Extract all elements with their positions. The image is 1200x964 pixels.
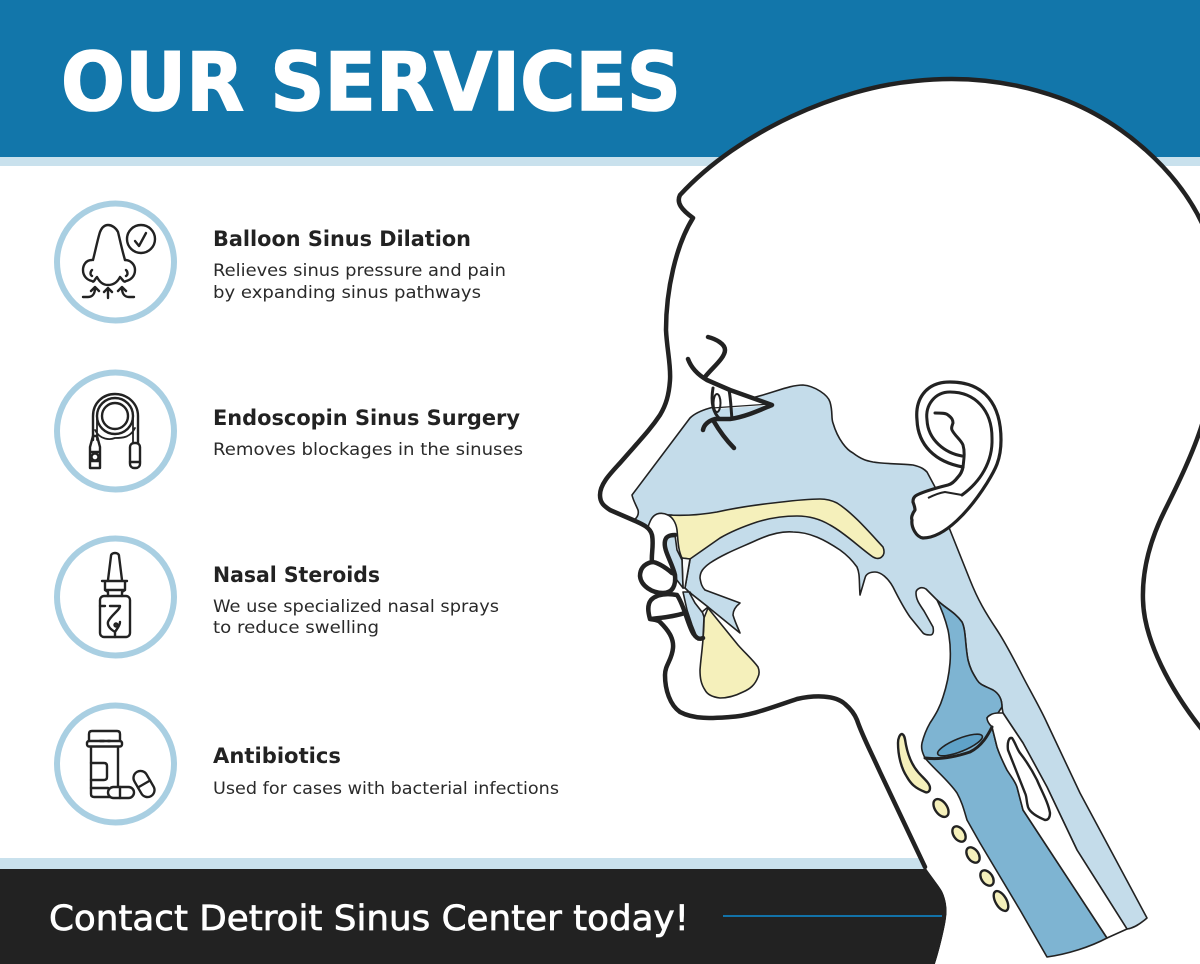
icon ring xyxy=(57,204,174,320)
footer bar xyxy=(0,858,947,964)
footer call to action: Contact Detroit Sinus Center today! xyxy=(49,899,689,939)
head outline xyxy=(600,79,1200,562)
service: nasal steroids xyxy=(57,538,499,656)
heading: Antibiotics xyxy=(213,744,341,768)
tracheal cartilage ring xyxy=(1008,738,1050,820)
upper lip xyxy=(640,535,675,593)
lower lip and chin xyxy=(648,594,925,867)
white premaxilla sliver xyxy=(682,558,690,588)
yellow mandible xyxy=(700,608,759,698)
head illustration xyxy=(600,79,1200,964)
yellow neck cartilage xyxy=(898,734,1011,913)
description: Relieves sinus pressure and pain xyxy=(213,261,506,281)
lower gum strip xyxy=(683,592,704,640)
icon: nose with check xyxy=(83,225,155,298)
icon ring xyxy=(57,706,174,822)
back of head xyxy=(1143,418,1200,732)
heading: Balloon Sinus Dilation xyxy=(213,227,471,251)
footer accent line xyxy=(723,915,942,917)
upper gum strip xyxy=(665,535,683,588)
heading: Nasal Steroids xyxy=(213,563,380,587)
description: to reduce swelling xyxy=(213,618,379,638)
description: We use specialized nasal sprays xyxy=(213,597,499,617)
lower tooth xyxy=(689,592,708,612)
icon: nasal spray bottle xyxy=(100,553,130,637)
service: endoscopic sinus surgery xyxy=(57,372,523,490)
light blue airway xyxy=(632,385,1147,929)
service: antibiotics xyxy=(57,706,559,822)
description xyxy=(213,261,506,303)
description: Used for cases with bacterial infections xyxy=(213,779,559,799)
eye and brow xyxy=(688,337,772,448)
white epiglottis and tube xyxy=(987,713,1127,938)
header band xyxy=(0,0,1200,166)
ear xyxy=(912,382,1001,538)
eye white xyxy=(716,386,771,409)
description: Removes blockages in the sinuses xyxy=(213,440,523,460)
service: balloon sinus dilation xyxy=(57,204,506,320)
larynx front curve xyxy=(925,727,992,759)
dark blue larynx and trachea xyxy=(922,600,1107,957)
vocal fold ellipse xyxy=(935,730,985,760)
description: by expanding sinus pathways xyxy=(213,283,481,303)
description xyxy=(213,597,499,638)
yellow hard palate xyxy=(668,499,884,559)
heading: Endoscopin Sinus Surgery xyxy=(213,406,520,430)
icon: endoscope cable xyxy=(90,394,140,468)
title: OUR SERVICES xyxy=(61,36,681,129)
icon ring xyxy=(57,372,174,490)
icon ring xyxy=(57,538,174,656)
icon: pill bottle and capsules xyxy=(87,731,157,800)
head silhouette fill xyxy=(600,79,1200,964)
